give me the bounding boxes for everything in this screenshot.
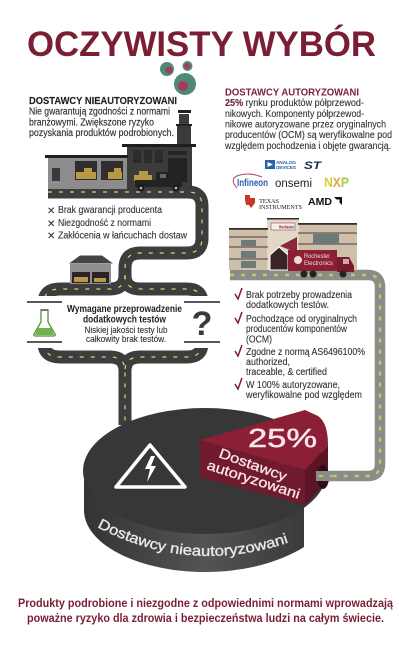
text block: unauthorized suppliers: Nie gwarantują zgodności z normami (29, 106, 170, 118)
logos: manufacturers: ANALOG (276, 160, 296, 166)
icon: small warehouse (69, 256, 113, 284)
list: drawbacks: ✕ (47, 231, 55, 242)
icon: factory (45, 110, 196, 189)
icon: Rochester truck: Rochester (304, 254, 330, 260)
list: drawbacks: Zakłócenia w łańcuchach dostaw (58, 230, 188, 242)
icon: Rochester Electronics building (229, 218, 357, 270)
slice: unauthorized top (83, 408, 327, 534)
benefit lines: producentów komponentów (246, 324, 348, 335)
logos: manufacturers: DEVICES (276, 165, 297, 171)
label: authorized suppliers: autoryzowani (205, 457, 302, 502)
benefit lines: authorized, (246, 357, 290, 368)
text block: authorized suppliers: nikowych. Komponenty półprzewod- (225, 109, 364, 120)
slice: unauthorized side (84, 471, 304, 572)
road: authorized route (230, 275, 380, 476)
heading: tests: Wymagane przeprowadzenie (67, 304, 182, 315)
icon: delivery truck (135, 172, 182, 192)
footer statement: poważne ryzyko dla zdrowia i bezpieczeństwa ludzi na całym świecie. (27, 611, 384, 625)
benefit lines: Zgodne z normą AS6496100% (246, 347, 365, 358)
text block: unauthorized suppliers: DOSTAWCY NIEAUTORYZOWANI (29, 95, 177, 107)
logos: manufacturers (233, 160, 349, 211)
benefit lines: Brak potrzeby prowadzenia (246, 290, 352, 301)
benefit lines: (OCM) (246, 334, 272, 346)
logos: manufacturers: onsemi (275, 178, 312, 190)
label: 25 percent: 25% (248, 423, 317, 453)
text block: unauthorized suppliers: pozyskania produktów podrobionych. (29, 128, 174, 139)
benefit lines: W 100% autoryzowane, (246, 380, 340, 391)
road: unauthorized route (44, 192, 202, 425)
label: authorized suppliers: Dostawcy (217, 445, 289, 484)
list: drawbacks: Brak gwarancji producenta (58, 205, 162, 216)
icon: Rochester truck (288, 250, 354, 278)
label: unauthorized suppliers: Dostawcy nieautoryzowani (98, 518, 288, 558)
text block: authorized suppliers: producentów (OCM) są weryfikowalne pod (225, 130, 392, 141)
benefit lines (245, 290, 365, 401)
heading: tests second line: dodatkowych testów (83, 314, 166, 326)
icon: Rochester Electronics building: Rochester (279, 224, 294, 230)
icon: Rochester truck: Electronics (304, 261, 333, 267)
text block: authorized suppliers: nikowe autoryzowane przez oryginalnych (225, 120, 386, 130)
label: authorized suppliers (205, 445, 302, 502)
text block: authorized suppliers: DOSTAWCY AUTORYZOWANI (225, 86, 359, 98)
list: drawbacks: Niezgodność z normami (58, 218, 151, 229)
list: drawbacks: ✕ (47, 206, 55, 217)
benefit lines: weryfikowalne pod względem (245, 390, 362, 401)
title: OCZYWISTY WYBÓR (27, 24, 376, 64)
text block: unauthorized suppliers: branżowymi. Zwiększone ryzyko (29, 118, 154, 128)
logos: manufacturers: ST (304, 160, 323, 172)
chart: 3D pie (83, 408, 332, 572)
text block: authorized suppliers: względem pochodzenia i objęte gwarancją. (224, 141, 391, 152)
list: benefits (235, 288, 365, 401)
panel: additional tests required (27, 296, 220, 348)
benefit lines: traceable, & certified (246, 367, 327, 378)
footer statement (18, 596, 393, 625)
logos: manufacturers: AMD (308, 196, 332, 208)
list: drawbacks (47, 205, 188, 242)
benefit lines: dodatkowych testów. (246, 300, 329, 311)
text: low quality tests: Niskiej jakości testy lub (84, 325, 168, 336)
icon: smoke clouds (160, 61, 196, 95)
icon: high voltage warning (116, 445, 185, 487)
icon: check marks (235, 288, 242, 389)
benefit lines: Pochodzące od oryginalnych (246, 314, 357, 325)
slice: authorized (200, 410, 332, 505)
list: drawbacks: ✕ (47, 219, 55, 230)
logos: manufacturers: NXP (324, 174, 349, 190)
text: no tests: całkowity brak testów. (86, 334, 166, 345)
icon: flask (34, 309, 55, 336)
logos: manufacturers: Infineon (237, 177, 268, 189)
icon: question mark: ? (192, 305, 212, 343)
text block: authorized suppliers: 25% rynku produktów półprzewod- (225, 98, 364, 109)
logos: manufacturers: TEXAS (259, 198, 279, 205)
text block: authorized suppliers (224, 86, 392, 152)
text block: unauthorized suppliers (29, 95, 177, 139)
logos: manufacturers: INSTRUMENTS (259, 204, 302, 211)
